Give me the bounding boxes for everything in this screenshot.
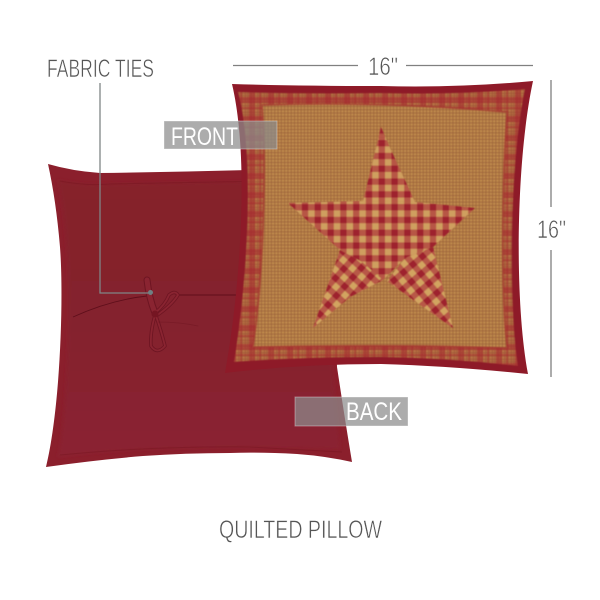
label: front: FRONT: [171, 123, 238, 151]
star patch: [288, 127, 475, 328]
callout: fabric ties: FABRIC TIES: [47, 55, 154, 83]
pillow back view: [46, 164, 352, 467]
height dimension: 16": [537, 216, 566, 244]
width dimension: 16": [368, 53, 398, 81]
pillow front view: [225, 81, 533, 374]
label: back: [295, 397, 408, 426]
title: quilted pillow: QUILTED PILLOW: [219, 516, 382, 544]
label: back: BACK: [346, 398, 402, 426]
back seam: [73, 295, 240, 317]
icon: fabric tie bow: [147, 280, 198, 350]
callout: fabric ties: [47, 55, 154, 295]
